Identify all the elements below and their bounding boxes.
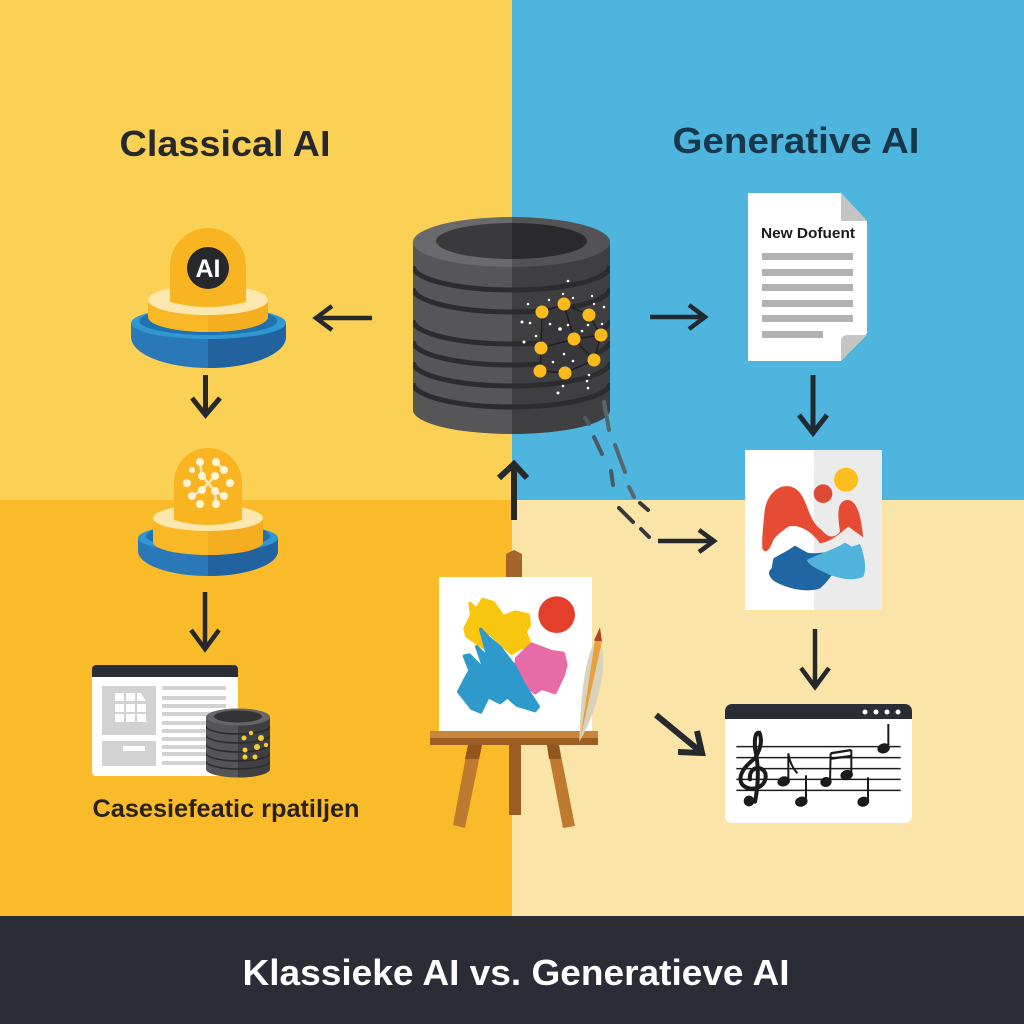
- heading: Classical AI: Classical AI: [120, 123, 330, 164]
- footer bar: [0, 916, 1024, 1024]
- icon: central database: [413, 217, 610, 434]
- arrow: document to artwork: [799, 375, 827, 433]
- arrow: platform to network platform: [192, 375, 220, 415]
- arrow: database to classical AI: [316, 306, 372, 330]
- icon: generated artwork: [745, 450, 882, 610]
- arrow: easel up to database: [499, 464, 527, 520]
- arrow: artwork to music: [801, 629, 829, 687]
- arrow: dashed branch to artwork: [658, 530, 714, 552]
- icon: treble clef: [740, 733, 766, 802]
- heading: Generative AI: Generative AI: [672, 120, 920, 161]
- icon: network platform: [138, 448, 278, 576]
- arrow: database to generative AI: [650, 305, 705, 329]
- arrow: easel to music: [656, 715, 702, 753]
- caption: classical output: Casesiefeatic rpatiljen: [92, 795, 360, 823]
- footer title: Klassieke AI vs. Generatieve AI: [242, 952, 790, 993]
- icon: AI platform: [131, 228, 286, 368]
- icon: new document: [748, 193, 867, 361]
- network in database: [520, 280, 608, 394]
- icon: new document: New Dofuent: [761, 225, 855, 242]
- icon: easel with painting: [430, 550, 603, 828]
- dashed paths from database: [585, 402, 649, 537]
- arrow: network platform to output: [191, 592, 219, 649]
- panel: music score window: [725, 704, 912, 823]
- icon: AI platform: AI: [196, 255, 220, 283]
- panel: classical output window: [92, 665, 270, 778]
- icon: small database: [206, 708, 270, 778]
